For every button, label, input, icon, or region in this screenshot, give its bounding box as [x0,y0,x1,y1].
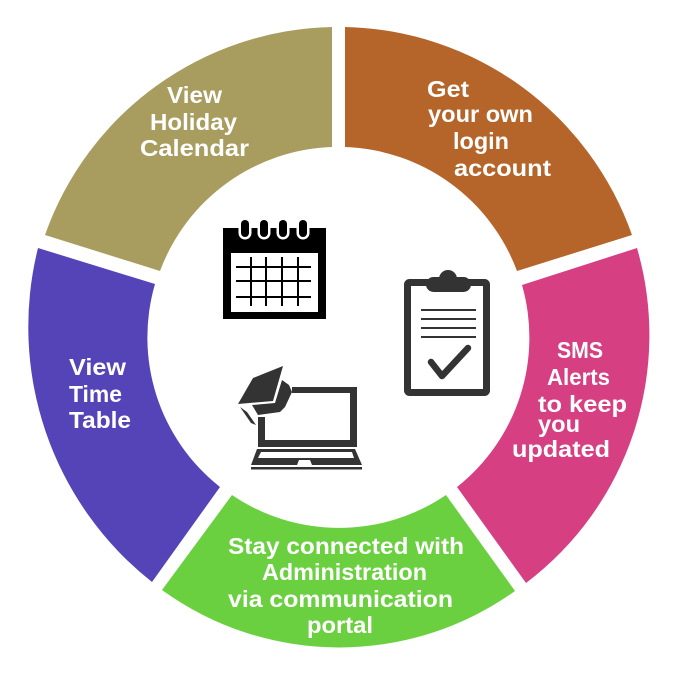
segment: get login account: your own [428,101,533,127]
icon: clipboard with check mark [408,270,486,392]
segment: SMS alerts: updated [512,436,610,462]
segment: SMS alerts: to keep [538,391,627,417]
segment: get login account: login [453,128,509,154]
segment: view time table: Table [69,407,131,433]
segment: SMS alerts [457,248,649,583]
segment: communication portal [162,495,515,647]
segment: SMS alerts: you [538,411,580,437]
segment: communication portal: Administration [262,559,427,585]
segment: SMS alerts: SMS [557,337,603,363]
segment: communication portal: portal [307,612,373,638]
segment: get login account [345,27,632,271]
segment: view holiday calendar: View [167,82,222,108]
segment: get login account: Get [427,76,469,102]
segment: view holiday calendar: Calendar [140,135,249,161]
icon: laptop with graduation cap [238,366,362,470]
segment: view time table [28,248,220,582]
segment: view holiday calendar: Holiday [150,109,237,135]
segment: communication portal: via communication [228,586,453,612]
segment: get login account: account [454,155,551,181]
segment: view time table: Time [69,381,122,407]
segment: view time table: View [69,354,126,380]
segment: SMS alerts: Alerts [547,364,610,390]
segment: communication portal: Stay connected with [228,533,464,559]
segment: view holiday calendar [45,27,332,271]
icon: calendar [223,220,326,319]
